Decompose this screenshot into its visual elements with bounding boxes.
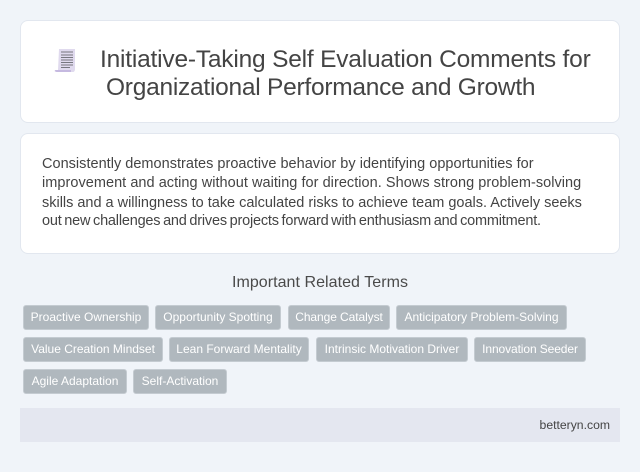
tag: [396, 305, 567, 330]
tag: Self-Activation: [142, 374, 218, 388]
description text: [42, 156, 582, 229]
tag: Innovation Seeder: [482, 342, 578, 356]
description text: skills and a willingness to take calculated risks to achieve team goals. Actively seeks: [42, 195, 582, 211]
panel: description card: [20, 133, 620, 254]
tag: [288, 305, 390, 330]
tag list: [23, 305, 586, 394]
tag: [169, 337, 309, 362]
tag: [474, 337, 586, 362]
tag: Intrinsic Motivation Driver: [325, 342, 459, 356]
title text: Organizational Performance and Growth: [106, 74, 535, 101]
tag: [133, 369, 227, 394]
tag: Agile Adaptation: [32, 374, 118, 388]
heading: related terms: Important Related Terms: [232, 274, 408, 291]
tag: Opportunity Spotting: [163, 310, 273, 324]
tag: Lean Forward Mentality: [176, 342, 302, 356]
tag: [23, 337, 163, 362]
footer bar: [20, 408, 620, 442]
panel: title card: [20, 20, 620, 123]
tag: Change Catalyst: [295, 310, 383, 324]
icon: paper scroll: [54, 49, 75, 72]
tag: Anticipatory Problem-Solving: [404, 310, 559, 324]
tag: Proactive Ownership: [31, 310, 141, 324]
title text: Initiative-Taking Self Evaluation Comments for: [100, 46, 591, 73]
tag: [23, 305, 149, 330]
footer text: betteryn.com: [540, 418, 610, 432]
tag: Value Creation Mindset: [31, 342, 155, 356]
description text: Consistently demonstrates proactive behavior by identifying opportunities for: [42, 156, 534, 172]
description text: out new challenges and drives projects forward with enthusiasm and commitment.: [42, 213, 541, 229]
tag: [23, 369, 127, 394]
tag: [316, 337, 468, 362]
title text: [100, 46, 591, 101]
tag: [155, 305, 281, 330]
description text: improvement and acting without waiting for direction. Shows strong problem-solving: [42, 175, 581, 191]
